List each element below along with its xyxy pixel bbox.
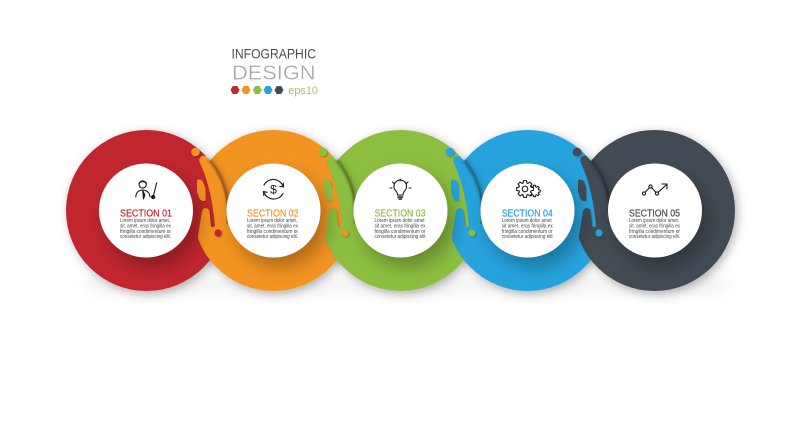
heading: section 03: SECTION 03	[374, 208, 426, 220]
ring: section 03	[320, 130, 481, 291]
icon: dollar cycle: $	[270, 182, 277, 196]
text block: section 04: consetetur adipiscing elit	[502, 234, 553, 240]
eps label: eps10	[288, 85, 318, 97]
link: section 01 to 02	[190, 148, 240, 285]
panel: section 02	[226, 164, 320, 258]
title: DESIGN	[232, 62, 316, 84]
panel: section 03	[354, 164, 448, 258]
text block: section 04	[502, 218, 553, 240]
ground shadow	[82, 274, 732, 294]
text block: section 02: sit. amet, eras fringilla ex	[247, 223, 298, 229]
text block: section 01: Lorem ipsum dolor amet,	[120, 218, 170, 224]
panel: section 01	[99, 164, 193, 258]
title	[232, 46, 316, 84]
heading: section 01: SECTION 01	[120, 208, 172, 220]
text block: section 04: Lorem ipsum dolor amet	[502, 218, 552, 224]
text block: section 02: consetetur adipiscing elit.	[247, 234, 298, 240]
text block: section 05: consetetur adipiscing elit.	[629, 234, 680, 240]
panel: section 04	[480, 164, 574, 258]
text block: section 01: sit. amet, eras fringilla ex	[120, 223, 171, 229]
text block: section 03	[374, 218, 426, 240]
icon: gears	[517, 181, 540, 197]
text block: section 05: fringilla condimentum or	[629, 229, 680, 235]
text block: section 04: sit amet, eras fringilla ex	[502, 223, 553, 229]
text block: section 05: sit. amet, eras fringilla ex	[629, 223, 680, 229]
link: section 04 to 05	[571, 148, 621, 285]
heading: section 04: SECTION 04	[502, 208, 553, 220]
text block: section 02: Lorem ipsum dolor amet,	[247, 218, 297, 224]
icon: light bulb	[390, 179, 411, 199]
text block: section 04: fringilla condimentum or	[502, 229, 553, 235]
panel: section 05	[608, 164, 702, 258]
text block: section 02	[247, 218, 298, 240]
icon: rising line chart	[642, 184, 667, 195]
heading: section 02: SECTION 02	[247, 208, 299, 220]
ring: section 04	[447, 130, 608, 291]
link: section 02 to 03	[317, 148, 367, 285]
text block: section 03: Lorem ipsum dolor amet	[374, 218, 425, 224]
text block: section 01: fringilla condimentum or	[120, 229, 171, 235]
text block: section 03: sit amet, eras fringilla ex	[374, 223, 426, 229]
link: section 03 to 04	[444, 148, 494, 285]
icon: presenter with pointer	[136, 181, 157, 199]
text block: section 03: consetetur adipiscing elit	[374, 234, 426, 240]
text block: section 05	[629, 218, 680, 240]
text block: section 03: fringilla condimentum or	[374, 229, 426, 235]
text block: section 02: fringilla condimentum or	[247, 229, 298, 235]
title: INFOGRAPHIC	[232, 46, 316, 62]
heading: section 05: SECTION 05	[629, 208, 680, 220]
ring: section 02	[193, 130, 354, 291]
ring: section 05	[574, 130, 735, 291]
text block: section 01: consetetur adipiscing elit.	[120, 234, 171, 240]
ring: section 01	[66, 130, 227, 291]
text block: section 05: Lorem ipsum dolor amet,	[629, 218, 679, 224]
text block: section 01	[120, 218, 171, 240]
colour swatches	[230, 86, 284, 94]
